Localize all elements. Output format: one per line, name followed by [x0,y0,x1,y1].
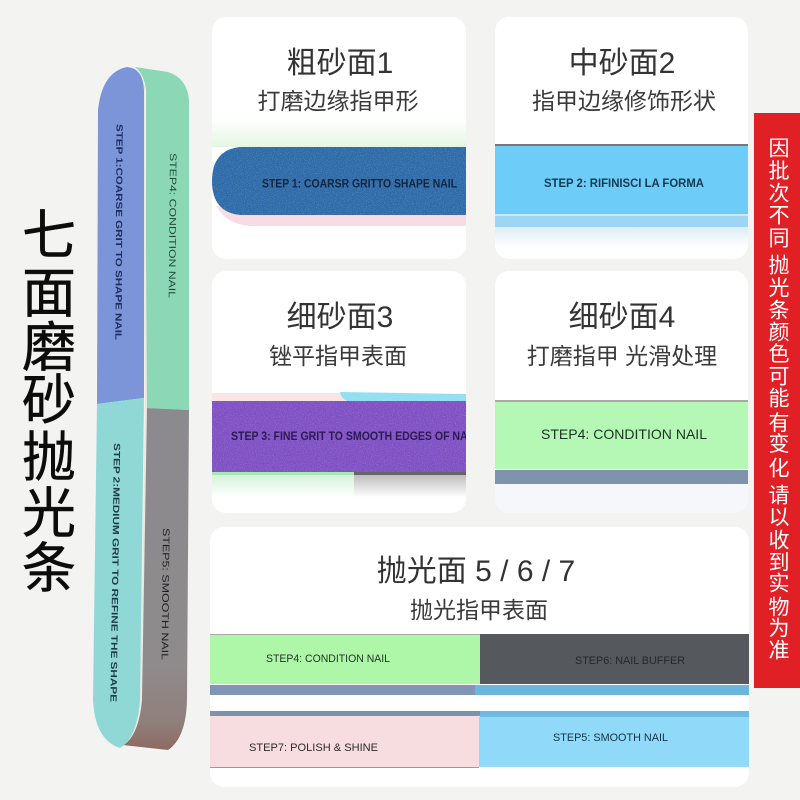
side face: green [135,67,189,410]
edge band [495,470,748,484]
label: step 2: STEP 2:MEDIUM GRIT TO REFINE THE SHAPE [108,443,122,702]
strip label: step 6: STEP6: NAIL BUFFER [575,655,685,667]
heading: 粗砂面1 [287,47,393,80]
subheading: 打磨边缘指甲形 [258,88,418,114]
edge highlight [122,85,146,745]
panel: polishing sides 5/6/7 [210,527,749,787]
label: step 4: STEP4: CONDITION NAIL [166,153,178,298]
notice text: 因批次不同抛光条颜色可能有变化请以收到实物为准 [768,138,790,662]
heading: 抛光面 5 / 6 / 7 [377,555,575,588]
front face: aqua [93,398,144,748]
panel: coarse side 1 [212,17,466,259]
file strip: green [495,402,748,469]
label: step 1: STEP 1:COARSE GRIT TO SHAPE NAIL [113,124,124,341]
edge band: upper [210,685,749,695]
strip label: STEP 2: RIFINISCI LA FORMA [544,176,704,190]
file strip: dark blue [212,147,466,215]
product photo: seven-sided buffer stick [93,67,189,750]
strip label: step 4: STEP4: CONDITION NAIL [266,653,390,665]
panel: fine side 3 [212,271,477,513]
face: step 4 green [210,635,480,684]
edge band: lower [210,711,749,717]
face: step 6 dark [480,634,749,684]
strip label: STEP4: CONDITION NAIL [541,426,707,442]
panel: fine side 4 [495,271,748,513]
panel: medium side 2 [495,17,748,259]
front face: blue [97,67,144,404]
heading: 细砂面4 [569,301,675,334]
subheading: 锉平指甲表面 [269,343,407,369]
notice banner: red [754,113,800,688]
strip label: STEP 3: FINE GRIT TO SMOOTH EDGES OF NAIL [231,429,477,443]
strip label: step 5: STEP5: SMOOTH NAIL [553,732,668,744]
side face: grey [122,408,189,750]
subheading: 打磨指甲 光滑处理 [527,343,717,369]
heading: 细砂面3 [287,301,393,334]
subheading: 抛光指甲表面 [410,597,548,623]
face: step 5 blue [479,717,749,767]
file strip: light blue [495,146,748,214]
label: step 5: STEP5: SMOOTH NAIL [159,528,171,660]
strip label: step 7: STEP7: POLISH & SHINE [249,742,378,754]
face: step 7 pink [210,716,480,767]
title: vertical product name: 七面磨砂抛光条 [22,206,76,599]
file strip: purple [212,401,466,472]
heading: 中砂面2 [569,47,675,80]
strip label: STEP 1: COARSR GRITTO SHAPE NAIL [262,176,457,190]
subheading: 指甲边缘修饰形状 [532,88,716,114]
